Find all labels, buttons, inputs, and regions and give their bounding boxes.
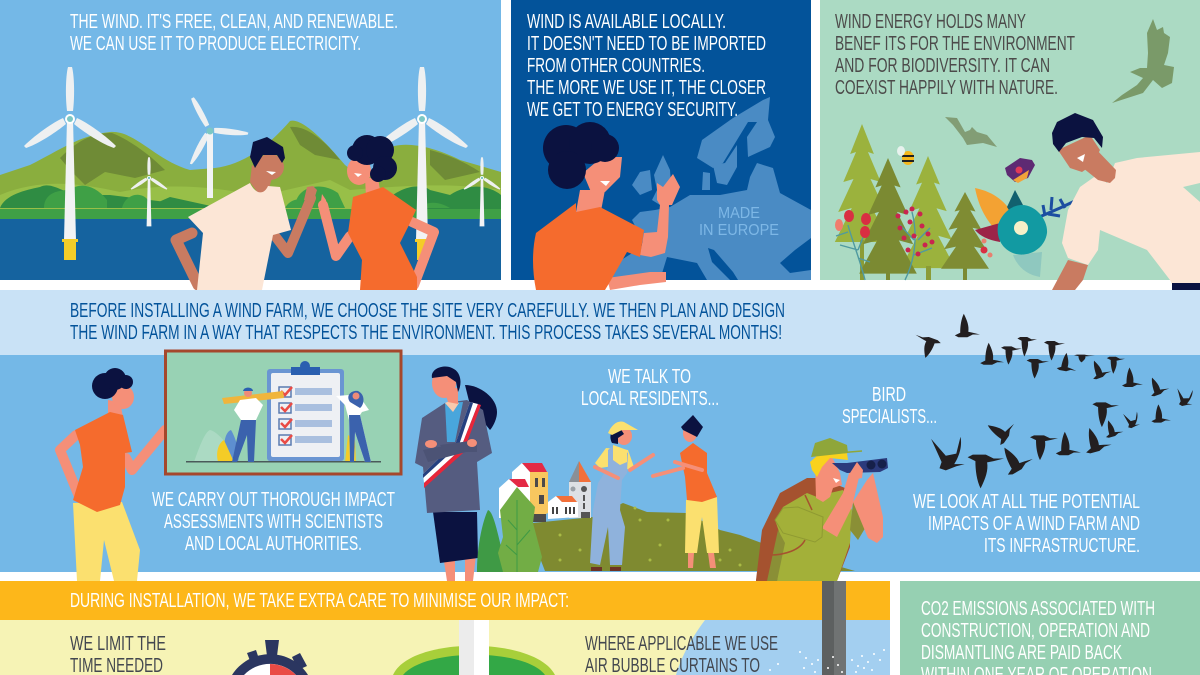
text: talk to residents: LOCAL RESIDENTS... [581, 387, 719, 410]
orange heading bar: DURING INSTALLATION, WE TAKE EXTRA CARE TO MINIMISE OUR IMPACT: [70, 589, 569, 612]
text: air bubble curtains [585, 632, 778, 675]
text: wind intro: WE CAN USE IT TO PRODUCE ELECTRICITY. [70, 32, 361, 55]
icon: stopwatch [232, 640, 308, 675]
text: potential impacts [913, 490, 1140, 557]
panel: biodiversity [820, 0, 1200, 290]
panel: available locally [511, 0, 811, 290]
heading band: site selection: BEFORE INSTALLING A WIND FARM, WE CHOOSE THE SITE VERY CAREFULLY. WE THEN PLAN AND DESIGN [70, 299, 785, 322]
text: bird specialists [842, 383, 937, 428]
text: environment benefits: AND FOR BIODIVERSITY. IT CAN [835, 54, 1050, 77]
trees [835, 124, 989, 280]
text: impact assessments: AND LOCAL AUTHORITIES. [185, 532, 362, 555]
text: wind is local: THE MORE WE USE IT, THE CLOSER [527, 76, 766, 99]
text: made in europe [699, 205, 779, 239]
text: wind intro: THE WIND. IT'S FREE, CLEAN, AND RENEWABLE. [70, 10, 398, 33]
orange heading bar [0, 581, 890, 620]
text: environment benefits [835, 10, 1075, 99]
figure: woman beside board [60, 368, 165, 581]
berries [835, 206, 934, 280]
text: bird specialists: SPECIALISTS... [842, 405, 937, 428]
panel: the wind [0, 0, 501, 290]
map of europe [605, 97, 811, 280]
icon: green dome [393, 646, 555, 675]
text: wind intro [70, 10, 398, 55]
wind turbines [24, 67, 500, 260]
icon: bat [945, 117, 997, 147]
text: environment benefits: WIND ENERGY HOLDS MANY [835, 10, 1026, 33]
text: wind is local: IT DOESN'T NEED TO BE IMPORTED [527, 32, 766, 55]
text: limit the time [70, 632, 166, 675]
air bubbles [769, 649, 885, 673]
icon: eagle [1112, 19, 1174, 103]
figure: mayor with sash [415, 366, 497, 581]
icon: small bird [1005, 158, 1035, 183]
text: wind is local [527, 10, 766, 121]
text: environment benefits: COEXIST HAPPILY WITH NATURE. [835, 76, 1058, 99]
text: talk to residents [581, 365, 719, 410]
panel: during installation [0, 581, 890, 675]
text: impact assessments: WE CARRY OUT THOROUGH IMPACT [152, 488, 395, 511]
figure: man in cream shirt [176, 137, 317, 290]
text: wind is local: WIND IS AVAILABLE LOCALLY. [527, 10, 726, 33]
small figures [222, 388, 371, 462]
flower and leaves [975, 188, 1077, 277]
text: talk to residents: WE TALK TO [608, 365, 691, 388]
heading band: site selection: THE WIND FARM IN A WAY THAT RESPECTS THE ENVIRONMENT. THIS PROCESS TAKES SEVERAL MONTHS! [70, 321, 782, 344]
village on hill [477, 461, 855, 572]
hills and shoreline [0, 121, 501, 280]
assessment board with checklist [166, 351, 401, 474]
flock of birds [909, 314, 1195, 488]
text: air bubble curtains: WHERE APPLICABLE WE USE [585, 632, 778, 655]
clipboard [267, 361, 344, 461]
text: environment benefits: BENEF ITS FOR THE ENVIRONMENT [835, 32, 1075, 55]
heading band: site selection [0, 290, 1200, 355]
text: wind is local: WE GET TO ENERGY SECURITY. [527, 98, 738, 121]
text: made in europe: MADE [718, 205, 760, 222]
figure: woman in orange shirt [320, 135, 434, 290]
buildings [499, 461, 591, 522]
figure: woman pointing at map [533, 122, 680, 290]
figure: man leaning [1052, 113, 1200, 290]
text: bird specialists: BIRD [872, 383, 906, 406]
panel: planning process [0, 355, 1200, 572]
turbine tower foreground [459, 620, 489, 675]
bushes [477, 510, 507, 572]
text: impact assessments: ASSESSMENTS WITH SCIENTISTS [164, 510, 383, 533]
text: impact assessments [152, 488, 395, 555]
water patch [676, 620, 890, 675]
panel: co2 payback [900, 581, 1200, 675]
figure: two residents talking [590, 415, 719, 571]
icon: bee [897, 146, 914, 165]
figure: bird specialist with binoculars [756, 438, 888, 581]
text: limit the time: WE LIMIT THE [70, 632, 166, 655]
text: made in europe: IN EUROPE [699, 222, 779, 239]
monopile [822, 581, 846, 675]
text: wind is local: FROM OTHER COUNTRIES. [527, 54, 705, 77]
